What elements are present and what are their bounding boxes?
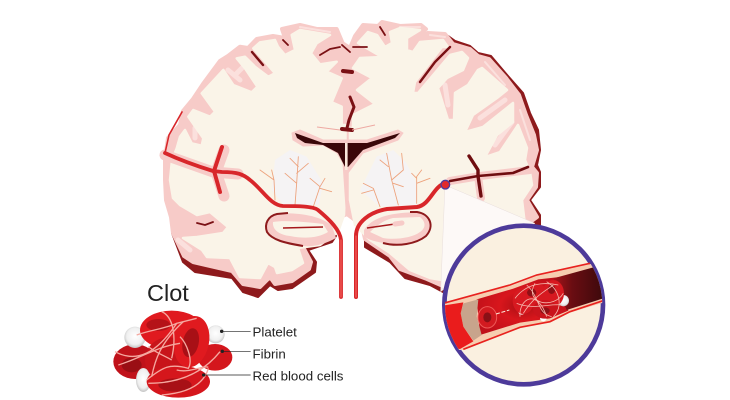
label: fibrin: Fibrin <box>252 346 286 362</box>
fibrin strands <box>115 312 220 395</box>
label: platelet: Platelet <box>252 324 297 340</box>
clot title: Clot <box>147 280 189 306</box>
zoom cone <box>441 185 535 292</box>
brain cross-section <box>165 22 540 297</box>
left white and gray matter <box>170 30 346 278</box>
leader dots and lines <box>202 330 251 376</box>
arteries <box>165 112 528 297</box>
artery with clot <box>440 263 607 350</box>
red blood cell in artery <box>478 307 497 328</box>
brain silhouette pink cortex <box>165 22 537 287</box>
flow arrow <box>496 310 509 314</box>
sulci dark creases <box>197 27 450 225</box>
ventricle <box>292 125 403 208</box>
target marker <box>441 180 450 189</box>
label: red blood cells: Red blood cells <box>252 368 344 384</box>
pink band and branch fold <box>165 150 530 198</box>
platelets <box>124 325 225 392</box>
lens circle <box>444 226 603 384</box>
left red blood cell <box>113 344 157 379</box>
basal ganglia pale zones <box>272 150 417 207</box>
temporal folds <box>266 212 431 246</box>
right white and gray matter <box>350 28 532 290</box>
small perforating arteries <box>260 153 430 207</box>
cortex highlights <box>178 27 530 250</box>
clot illustration <box>113 311 251 398</box>
brain outer shadow <box>172 36 540 297</box>
magnified view <box>440 180 607 384</box>
red blood cells <box>122 311 232 398</box>
clot in artery <box>513 280 569 321</box>
